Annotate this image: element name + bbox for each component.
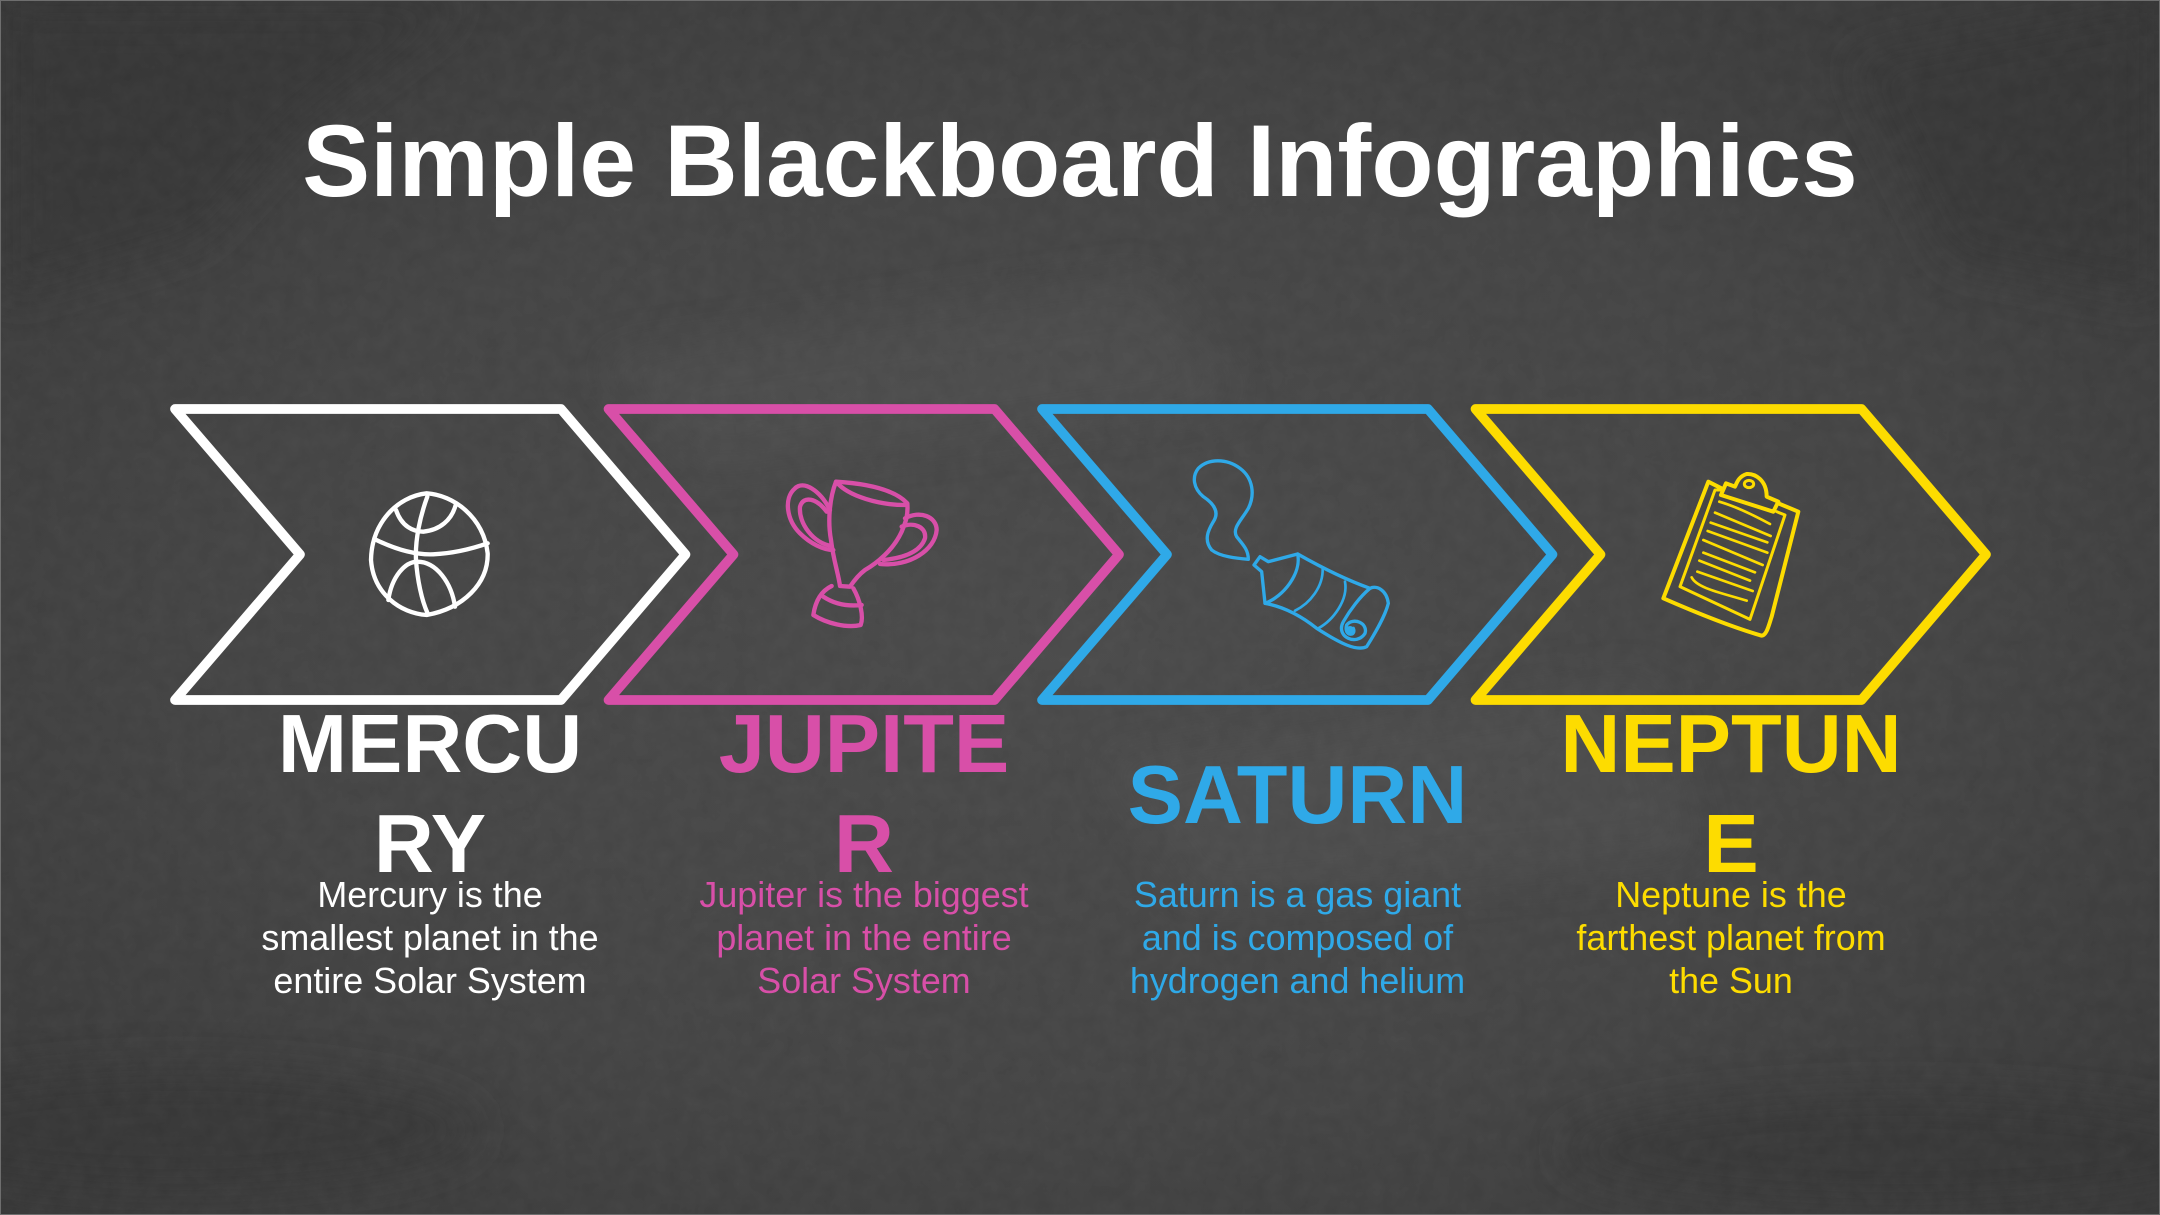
icon: trophy xyxy=(788,482,937,626)
heading: jupiter: JUPITE xyxy=(719,697,1009,790)
panel: jupiter text xyxy=(699,697,1029,1000)
heading: neptune: E xyxy=(1703,797,1759,890)
heading: neptune xyxy=(1560,697,1902,890)
arrow: jupiter outline xyxy=(608,409,1119,700)
heading: jupiter: R xyxy=(834,797,894,890)
panel: neptune text xyxy=(1560,697,1902,1000)
icon: basketball xyxy=(371,493,488,615)
title: Simple Blackboard Infographics xyxy=(302,104,1858,218)
panel: saturn text xyxy=(1128,748,1467,1000)
heading: neptune: NEPTUN xyxy=(1560,697,1902,790)
arrow: neptune outline xyxy=(1476,409,1986,700)
heading: jupiter xyxy=(719,697,1009,890)
text: jupiter description: Jupiter is the biggest xyxy=(699,874,1029,914)
panel: mercury text xyxy=(261,697,599,1000)
text: mercury description: Mercury is the xyxy=(317,874,543,914)
arrow: saturn outline xyxy=(1042,409,1552,700)
text: mercury description xyxy=(261,874,599,1000)
text: saturn description: and is composed of xyxy=(1142,918,1453,958)
text: jupiter description: planet in the entire xyxy=(716,918,1012,958)
text: saturn description xyxy=(1130,874,1465,1000)
heading: saturn: SATURN xyxy=(1128,748,1467,841)
text: jupiter description: Solar System xyxy=(757,960,971,1000)
text: saturn description: Saturn is a gas giant xyxy=(1134,874,1461,914)
text: neptune description: the Sun xyxy=(1669,960,1793,1000)
heading: mercury: MERCU xyxy=(278,697,582,790)
arrow: mercury outline xyxy=(175,409,686,700)
text: saturn description: hydrogen and helium xyxy=(1130,960,1465,1000)
text: mercury description: smallest planet in the xyxy=(261,918,599,958)
text: jupiter description xyxy=(699,874,1029,1000)
icon: clipboard xyxy=(1663,474,1798,636)
heading: mercury xyxy=(278,697,582,890)
text: mercury description: entire Solar System xyxy=(273,960,587,1000)
text: neptune description: farthest planet from xyxy=(1576,918,1886,958)
text: neptune description: Neptune is the xyxy=(1615,874,1847,914)
heading: mercury: RY xyxy=(374,797,486,890)
text: neptune description xyxy=(1576,874,1886,1000)
icon: paint tube xyxy=(1194,461,1388,648)
